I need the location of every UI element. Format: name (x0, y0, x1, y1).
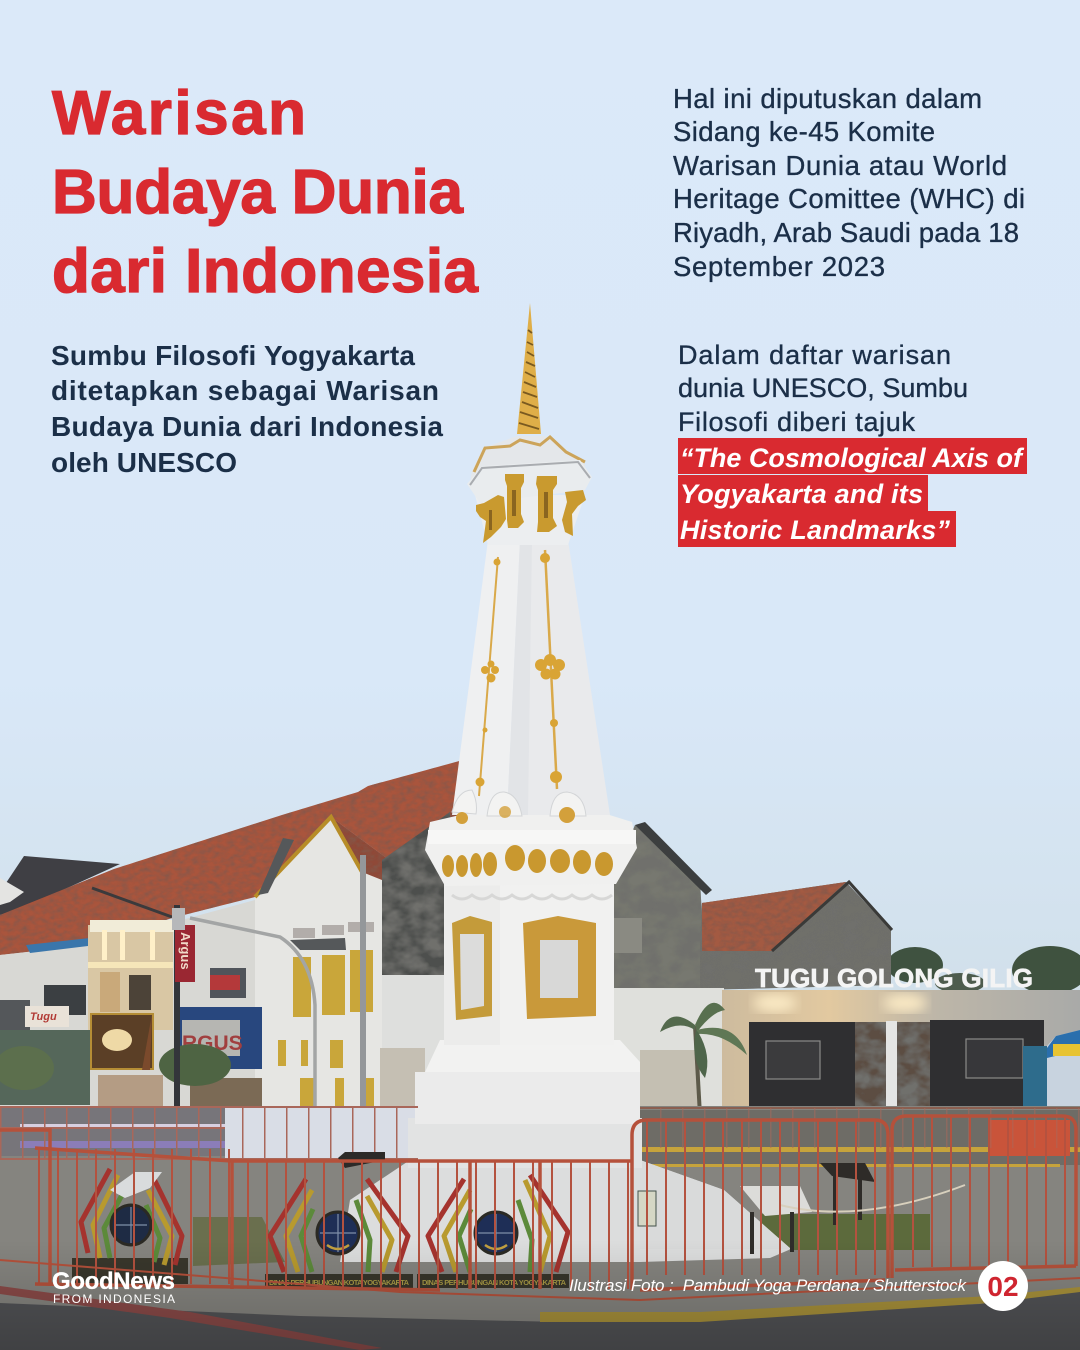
yellow windows (278, 950, 374, 1106)
barricade fences (0, 1107, 1080, 1300)
text block: WHC session: Warisan Dunia atau World (673, 150, 1007, 181)
back fences (0, 1107, 1080, 1159)
title: dari Indonesia (52, 237, 479, 306)
subtitle text block: Budaya Dunia dari Indonesia (51, 411, 443, 442)
title: Budaya Dunia (52, 158, 464, 227)
text block: WHC session (673, 83, 1025, 282)
photo scene: right buildings and Tugu Golong Gilig wall (610, 822, 1080, 1117)
text block: WHC session: Sidang ke-45 Komite (673, 116, 935, 147)
page number badge (978, 1261, 1028, 1311)
emblem 3 (428, 1175, 568, 1272)
monument middle block with plaques (444, 880, 614, 1045)
monument gold spire (517, 303, 541, 434)
street lamp and poles (92, 855, 363, 1106)
text block: WHC session: Heritage Comittee (WHC) di (673, 183, 1025, 214)
text block: WHC session: Hal ini diputuskan dalam (673, 83, 982, 114)
photo scene: left colonial buildings: Tugu (30, 1011, 57, 1023)
monument shaft (452, 540, 610, 824)
dark banner strips (72, 1258, 569, 1288)
ground: plaza and road (0, 1106, 1080, 1350)
subtitle text block: ditetapkan sebagai Warisan (51, 375, 439, 406)
text block: UNESCO listing (678, 340, 968, 437)
emblem 1 (81, 1169, 182, 1265)
monument crown and gold brackets (467, 436, 592, 545)
title: Warisan (52, 79, 306, 148)
monument cornice with gold leaves (425, 812, 637, 886)
subtitle text block: Sumbu Filosofi Yogyakarta (51, 340, 415, 371)
front fence panels (0, 1116, 1080, 1300)
logo: GoodNews from Indonesia: FROM INDONESIA (53, 1292, 175, 1306)
text block: UNESCO listing: Dalam daftar warisan (678, 340, 951, 370)
title (52, 79, 479, 306)
callout: highlighted title: Yogyakarta and its (680, 479, 923, 509)
callout: highlighted title: “The Cosmological Axis of (680, 443, 1025, 473)
subtitle text block: oleh UNESCO (51, 447, 237, 478)
text block: UNESCO listing: Filosofi diberi tajuk (678, 407, 916, 437)
photo scene: left colonial buildings (0, 760, 463, 1108)
dark banner strips: DINAS PERHUBUNGAN KOTA YOGYAKARTA (269, 1278, 410, 1287)
text block: WHC session: September 2023 (673, 251, 885, 282)
text block: WHC session: Riyadh, Arab Saudi pada 18 (673, 217, 1019, 248)
page number badge: 02 (987, 1271, 1019, 1302)
text block: UNESCO listing: dunia UNESCO, Sumbu (678, 373, 968, 403)
sign: Tugu Golong Gilig: TUGU GOLONG GILIG (755, 963, 1033, 993)
subtitle text block (51, 340, 443, 478)
monument: Tugu Yogyakarta (340, 303, 791, 1262)
photo scene: left colonial buildings: Argus (178, 932, 193, 970)
dark banner strips: DINAS PERHUBUNGAN KOTA YOGYAKARTA (422, 1278, 567, 1287)
photo scene: left colonial buildings: RGUS (182, 1032, 243, 1055)
logo: GoodNews from Indonesia: GoodNews (52, 1268, 175, 1295)
palm tree (660, 1003, 747, 1115)
info tables and sign (338, 1152, 965, 1254)
emblem 2 (270, 1179, 408, 1272)
callout: highlighted title: Historic Landmarks” (680, 515, 950, 545)
callout: highlighted title (678, 438, 1027, 547)
monument lower plinth (340, 1040, 791, 1262)
photo credit: Ilustrasi Foto : Pambudi Yoga Perdana / Shutterstock (569, 1276, 968, 1295)
